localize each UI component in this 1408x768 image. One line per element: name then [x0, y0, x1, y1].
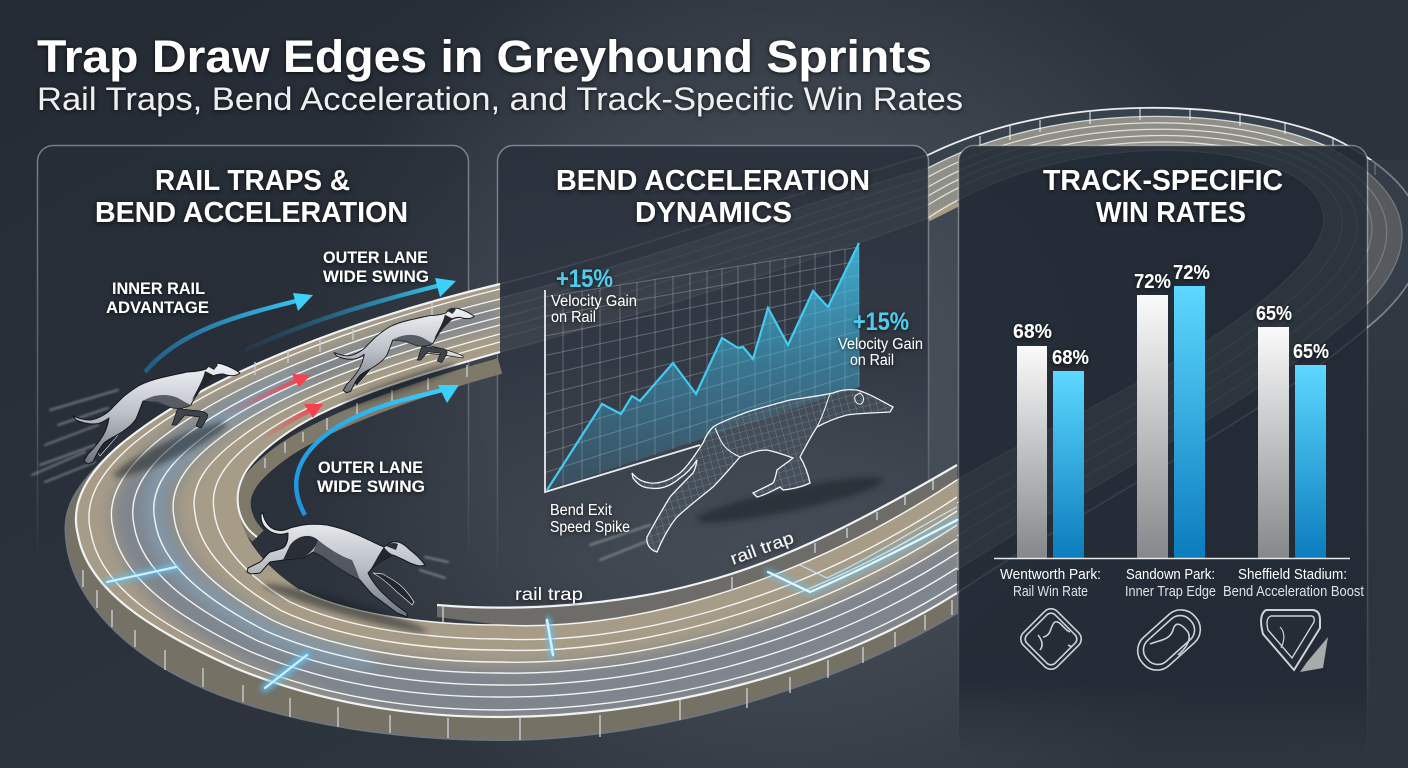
trap marker: straight	[547, 620, 553, 655]
velocity callout right: Velocity Gain	[838, 336, 923, 353]
lane lines	[89, 289, 957, 710]
bars: Sandown Park: 72%	[1134, 271, 1171, 293]
track label: Sandown Park	[1125, 567, 1216, 600]
racetrack	[65, 284, 965, 740]
track surface	[76, 284, 957, 717]
bar chart: track-specific win rates	[994, 262, 1350, 558]
heading: bend acceleration dynamics	[556, 165, 870, 229]
chart axis	[994, 558, 1350, 560]
label: outer lane wide swing upper: WIDE SWING	[323, 267, 429, 286]
bars: Sheffield Stadium: 65%	[1256, 303, 1292, 325]
bars: Wentworth Park: 68%	[1052, 347, 1089, 369]
panel: track-specific win rates frame	[958, 146, 1368, 756]
icon: greyhound leaving the bend	[247, 513, 425, 617]
chart grid	[545, 247, 859, 486]
icon: Wentworth Park track map	[1017, 605, 1085, 673]
bars: Sandown Park: 72%	[1173, 262, 1210, 284]
label: inner rail advantage: INNER RAIL	[112, 279, 205, 298]
arrow: inner rail advantage	[145, 293, 313, 372]
arrow: outer lane upper	[245, 278, 456, 350]
rail trap label: straight: rail trap	[515, 584, 583, 604]
panel: bend acceleration dynamics frame	[498, 146, 928, 586]
inner rail	[238, 352, 500, 537]
icon: Sandown Park track map	[1130, 602, 1208, 678]
heading: rail traps and bend acceleration: BEND ACCELERATION	[95, 197, 408, 229]
rail trap label: bend exit: rail trap	[728, 527, 796, 569]
label: outer lane wide swing upper: OUTER LANE	[323, 248, 428, 267]
velocity callout left: +15%	[556, 265, 613, 293]
icon: greyhound on far straight	[334, 308, 474, 393]
label: outer lane wide swing lower	[317, 458, 425, 496]
bars: Sheffield Stadium	[1256, 303, 1329, 558]
inner wall upper	[243, 366, 500, 536]
grey racing band	[111, 299, 965, 725]
chart axes	[545, 290, 700, 492]
heading: track-specific win rates: TRACK-SPECIFIC	[1043, 165, 1283, 197]
track label: Sandown Park: Inner Trap Edge	[1125, 584, 1216, 600]
dog shadows	[110, 359, 458, 638]
heading: track-specific win rates	[1043, 165, 1283, 229]
track label: Wentworth Park: Rail Win Rate	[1013, 584, 1088, 600]
icon: Sheffield Stadium track map	[1261, 610, 1328, 672]
chart line	[547, 243, 859, 490]
trap marker: lower bend	[265, 655, 307, 688]
heading: track-specific win rates: WIN RATES	[1096, 197, 1246, 229]
label: outer lane wide swing lower: OUTER LANE	[318, 458, 423, 477]
speed streaks	[32, 390, 650, 578]
chart area fill	[547, 243, 859, 490]
bars: Sandown Park	[1134, 262, 1210, 558]
arrow: red lower	[260, 404, 323, 440]
bars: Sheffield Stadium: 65%	[1293, 341, 1329, 363]
bars: Wentworth Park	[1013, 321, 1089, 558]
trap marker: left bend	[107, 567, 176, 582]
icon: wireframe greyhound	[632, 390, 893, 552]
inner wall lower	[437, 465, 957, 626]
glowing trap marker lines	[107, 507, 957, 688]
far track loop behind panels	[500, 108, 1408, 593]
outer wall	[65, 445, 957, 740]
title: Trap Draw Edges in Greyhound Sprints	[37, 31, 932, 82]
panel: rail traps and bend acceleration frame	[38, 146, 468, 566]
track label: Sandown Park: Sandown Park:	[1126, 567, 1215, 583]
track label: Sheffield Stadium	[1223, 567, 1364, 600]
outer rail	[76, 284, 957, 717]
arrow: outer lane lower	[296, 385, 459, 515]
label: inner rail advantage	[106, 279, 209, 317]
velocity callout left: Velocity Gain	[551, 293, 637, 310]
velocity callout right: on Rail	[850, 352, 894, 369]
heading: rail traps and bend acceleration: RAIL TRAPS &	[155, 165, 350, 197]
heading: bend acceleration dynamics: DYNAMICS	[635, 197, 792, 229]
heading: rail traps and bend acceleration	[95, 165, 408, 229]
label: outer lane wide swing lower: WIDE SWING	[317, 477, 425, 496]
track inner edge	[300, 480, 957, 626]
heading: bend acceleration dynamics: BEND ACCELERATION	[556, 165, 870, 197]
track label: Wentworth Park	[1000, 567, 1101, 600]
arrows	[145, 278, 459, 515]
bend exit label	[550, 502, 630, 536]
bend exit label: Bend Exit	[550, 502, 613, 519]
inner rail lower run	[437, 465, 957, 608]
label: outer lane wide swing upper	[323, 248, 429, 286]
bend exit label: Speed Spike	[550, 519, 630, 536]
label: inner rail advantage: ADVANTAGE	[106, 298, 209, 317]
wall posts	[83, 303, 952, 740]
track label: Sheffield Stadium: Sheffield Stadium:	[1238, 567, 1347, 583]
trap marker: bend exit	[768, 507, 957, 592]
arrow: red upper	[226, 374, 311, 414]
icon: greyhound on top of the bend	[73, 363, 240, 464]
track label: Sheffield Stadium: Bend Acceleration Boost	[1223, 584, 1364, 600]
blue glow along the bend	[153, 378, 370, 662]
velocity callout right: +15%	[853, 308, 909, 336]
velocity callout left	[551, 265, 637, 326]
subtitle: Rail Traps, Bend Acceleration, and Track-Specific Win Rates	[37, 81, 963, 117]
bars: Wentworth Park: 68%	[1013, 321, 1052, 343]
velocity callout left: on Rail	[551, 309, 596, 326]
track label: Wentworth Park: Wentworth Park:	[1000, 567, 1101, 583]
chart: bend exit speed spike	[545, 243, 859, 492]
velocity callout right	[838, 308, 923, 369]
